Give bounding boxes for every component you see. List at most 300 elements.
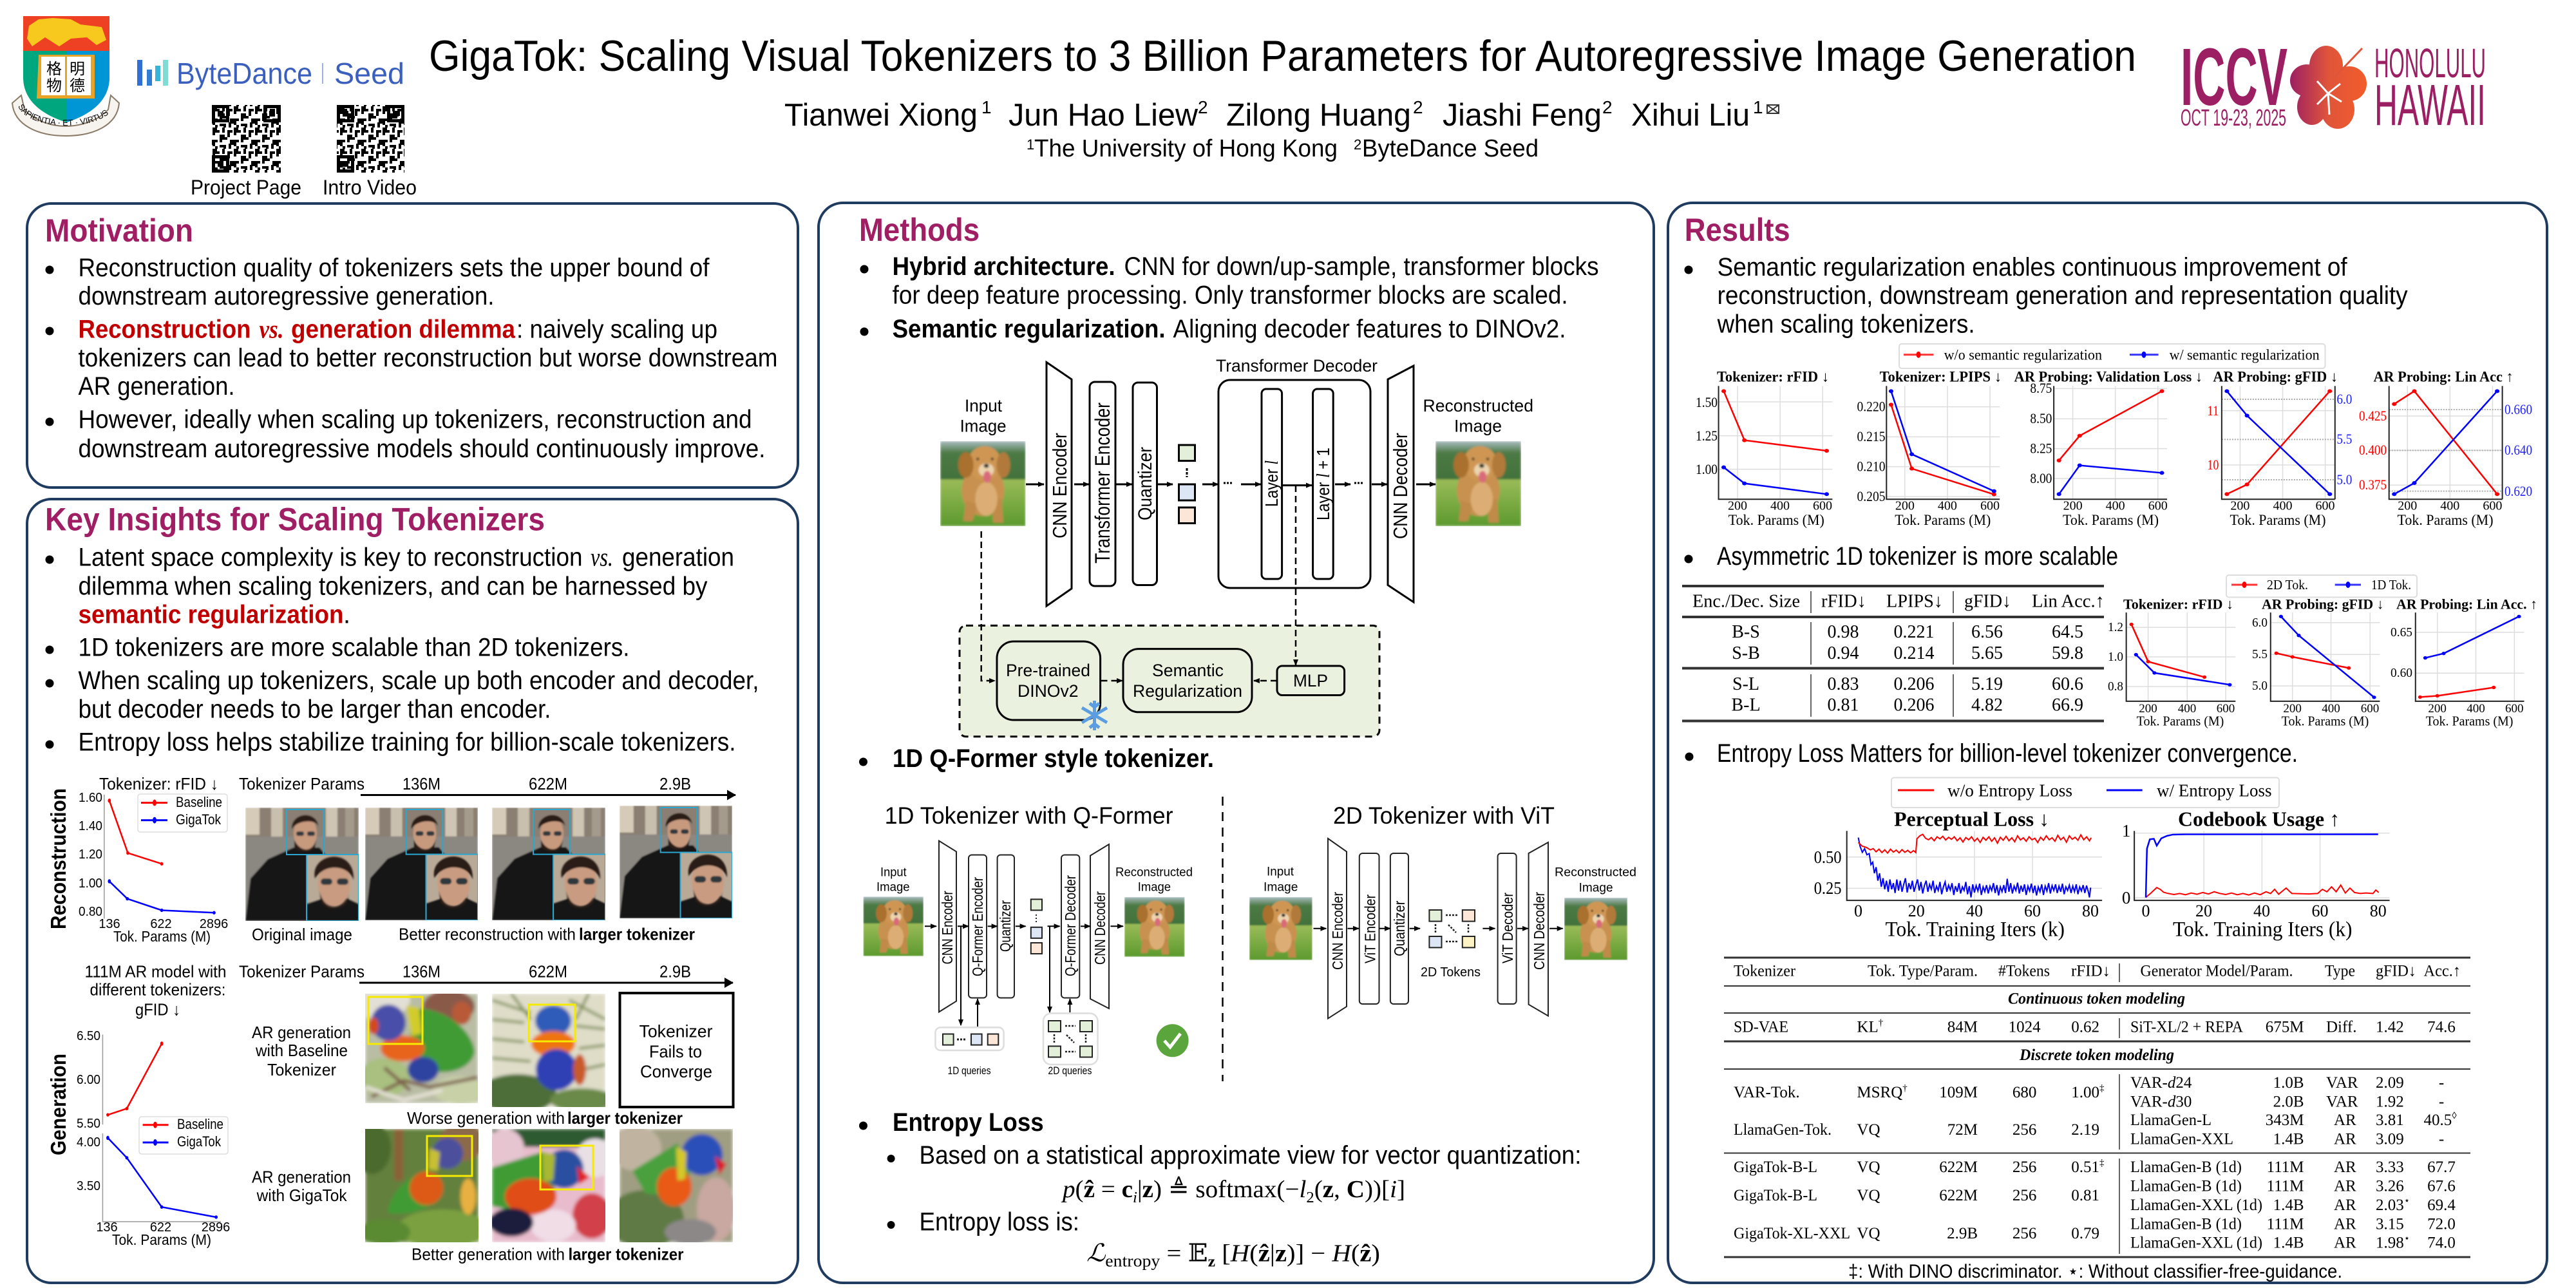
- bullet: dilemma: tokenizers can lead to better reconstruction but worse downstream: [79, 344, 778, 372]
- caption: worse generation: [407, 1108, 683, 1128]
- diagram: 2D tokenizer with ViT: ViT Encoder: [1361, 895, 1378, 963]
- bullet: dilemma: AR generation.: [79, 372, 234, 401]
- chart: tokenizer rFID: 1.60: [79, 791, 102, 805]
- reconstruction comparison header: Tokenizer Params: [239, 774, 365, 793]
- chart: tokenizer rFID: 136: [99, 917, 120, 931]
- pre-trained DINOv2: [997, 641, 1101, 720]
- authors: Zilong Huang: [1226, 98, 1411, 133]
- table: encoder decoder sizes: S-L: [1732, 674, 1759, 694]
- heading: key insights: Key Insights for Scaling Tokenizers: [45, 501, 545, 537]
- rows: VAR and LlamaGen tokenizers: VAR: [2326, 1074, 2358, 1092]
- table header: #Tokens: [1998, 963, 2050, 980]
- chart: generation gFID: 111M AR model with: [85, 962, 227, 981]
- table header: Acc.↑: [2424, 963, 2461, 980]
- chart: validation loss: Tok. Params (M): [2063, 512, 2159, 528]
- chart: generation gFID: 4.00: [77, 1135, 100, 1150]
- table: encoder decoder sizes: B-L: [1731, 695, 1761, 715]
- reconstruction comparison header: 2.9B: [659, 774, 691, 793]
- chart: 2D vs 1D linear accuracy: 0.60: [2391, 666, 2412, 680]
- bullet: ideally: downstream autoregressive models should continuously improve.: [79, 435, 765, 463]
- label: project page: Project Page: [191, 176, 301, 199]
- table: tokenizer comparison: [1724, 958, 2470, 1257]
- reconstruction image: 136M: [365, 808, 478, 920]
- chart: tokenizer rFID: Tok. Params (M): [1728, 512, 1824, 528]
- table: encoder decoder sizes: 0.206: [1893, 695, 1935, 715]
- bullet: upper bound: downstream autoregressive generation.: [79, 282, 495, 310]
- rows: GigaTok tokenizers: ⋆: [2404, 1234, 2410, 1244]
- chart: perceptual loss: 0.50: [1814, 848, 1842, 867]
- rows: GigaTok tokenizers: LlamaGen-XXL (1d): [2130, 1234, 2262, 1252]
- legend: 2D vs 1D tokenizer: [2226, 575, 2417, 597]
- chart: tokenizer LPIPS: 0.210: [1857, 459, 1886, 475]
- chart: generation gFID: 3.50: [77, 1179, 100, 1193]
- chart: validation loss: 8.00: [2030, 470, 2052, 486]
- chart: codebook usage: [2122, 808, 2390, 942]
- bullet: entropy loss: Entropy Loss: [893, 1108, 1044, 1137]
- bullet: ideally: However, ideally when scaling up tokenizers, reconstruction and: [79, 406, 752, 434]
- chart: 2D vs 1D gFID: 5.0: [2252, 679, 2268, 693]
- authors: 1: [981, 97, 992, 117]
- chart: validation loss: 600: [2148, 499, 2168, 513]
- chart: tokenizer LPIPS: Tok. Params (M): [1895, 512, 1991, 528]
- icon: HKU crest: [12, 16, 120, 137]
- chart: codebook usage: 60: [2312, 902, 2329, 920]
- chart: perceptual loss: 80: [2082, 902, 2099, 920]
- table: encoder decoder sizes: 64.5: [2052, 622, 2083, 642]
- chart: tokenizer rFID: 2896: [200, 917, 228, 931]
- chart: 2D vs 1D rFID: 200: [2139, 702, 2157, 715]
- chart: probing linear accuracy: Tok. Params (M): [2397, 512, 2494, 528]
- panel: methods: [819, 203, 1654, 1283]
- caption: better reconstruction: larger tokenizer: [579, 925, 695, 944]
- legend: GigaTok: [176, 811, 222, 828]
- semantic regularization box: Semantic: [1152, 661, 1224, 680]
- formula: entropy loss: entropy: [1105, 1252, 1160, 1271]
- bullet: 1D Q-Former: 1D Q-Former style tokenizer.: [893, 744, 1214, 773]
- chart: tokenizer LPIPS: 0.220: [1857, 399, 1886, 415]
- formula: quantization probability: i: [1133, 1189, 1137, 1206]
- chart: perceptual loss: 0: [1854, 902, 1862, 920]
- rows: VAR and LlamaGen tokenizers: 1.00: [2071, 1084, 2099, 1101]
- label: AR generation with baseline: with Baseline: [255, 1041, 348, 1060]
- icon: HKU crest: 明: [70, 61, 85, 78]
- chart: probing gFID: 5.5: [2336, 431, 2352, 447]
- chart: tokenizer LPIPS: Tokenizer: LPIPS ↓: [1880, 369, 2002, 385]
- table: encoder decoder sizes: S-B: [1732, 643, 1760, 663]
- CNN encoder: CNN Encoder: [1048, 433, 1071, 538]
- heading: methods: Methods: [859, 212, 980, 248]
- legend: semantic regularization: [1899, 344, 2325, 368]
- chart: probing linear accuracy: 200: [2398, 499, 2417, 513]
- chart: tokenizer rFID: 400: [1770, 499, 1790, 513]
- legend: [138, 794, 227, 832]
- rows: VAR and LlamaGen tokenizers: -: [2439, 1131, 2444, 1148]
- bullet: hybrid architecture: Hybrid architecture.: [893, 252, 1115, 281]
- table: encoder decoder sizes: 60.6: [2052, 674, 2083, 694]
- bullet: semantic regularization: Semantic regularization.: [893, 315, 1166, 343]
- chart: 2D vs 1D linear accuracy: Tok. Params (M): [2426, 713, 2513, 728]
- chart: generation gFID: 2896: [202, 1220, 230, 1235]
- rows: GigaTok tokenizers: 111M: [2267, 1216, 2304, 1233]
- bullet: asymmetric 1D tokenizer: Asymmetric 1D tokenizer is more scalable: [1717, 542, 2118, 571]
- icon: ICCV Honolulu logo: OCT 19-23, 2025: [2181, 104, 2286, 131]
- chart: tokenizer rFID: 600: [1813, 499, 1832, 513]
- table: encoder decoder sizes: 5.19: [1971, 674, 2003, 694]
- authors: Jiashi Feng: [1443, 98, 1602, 133]
- caption: better generation: [412, 1244, 684, 1264]
- legend: entropy loss: [1891, 778, 2279, 808]
- 1D queries: 1D queries: [948, 1065, 990, 1077]
- icon: snowflake: [1082, 701, 1107, 730]
- semantic regularization region: [960, 625, 1379, 737]
- icon: HKU crest: 物: [46, 77, 62, 95]
- rows: VAR and LlamaGen tokenizers: AR: [2334, 1112, 2356, 1129]
- row: SD-VAE: Diff.: [2326, 1019, 2356, 1036]
- MLP box: MLP: [1293, 671, 1328, 690]
- chart: tokenizer rFID: 1.50: [1696, 394, 1718, 410]
- chart: probing gFID: 400: [2273, 499, 2293, 513]
- rows: GigaTok tokenizers: GigaTok-B-L: [1734, 1159, 1817, 1176]
- chart: probing linear accuracy: 0.425: [2359, 408, 2387, 424]
- formula: entropy loss: = 𝔼: [1160, 1240, 1208, 1267]
- diagram: semantic regularization architecture: [940, 356, 1533, 737]
- diagram: 2D tokenizer with ViT: CNN Decoder: [1531, 892, 1548, 970]
- chart: 2D vs 1D gFID: [2252, 596, 2384, 728]
- label: AR generation with baseline: [252, 1023, 351, 1079]
- label: AR generation with baseline: AR generation: [252, 1023, 351, 1042]
- chart: tokenizer LPIPS: 0.215: [1857, 428, 1886, 444]
- table: encoder decoder sizes: Enc./Dec. Size: [1692, 591, 1800, 612]
- bullet: hybrid architecture: [860, 252, 1598, 310]
- flow arrows: [1026, 483, 1435, 486]
- rows: GigaTok tokenizers: 2.03: [2376, 1197, 2404, 1214]
- chart: probing gFID: 200: [2230, 499, 2249, 513]
- input image block: Input: [965, 396, 1002, 415]
- icon: green check: [1157, 1024, 1189, 1057]
- chart: validation loss: [2014, 369, 2202, 528]
- input image block: [940, 396, 1025, 526]
- bullet: dilemma: generation dilemma: [291, 316, 516, 344]
- rows: GigaTok tokenizers: ‡: [2099, 1158, 2105, 1168]
- rows: VAR and LlamaGen tokenizers: LlamaGen-Tok.: [1734, 1121, 1832, 1139]
- chart: 2D vs 1D rFID: 0.8: [2108, 679, 2123, 694]
- chart: generation gFID: 136: [96, 1220, 118, 1235]
- chart: 2D vs 1D linear accuracy: 0.65: [2391, 625, 2412, 639]
- reconstruction image: 622M: [492, 808, 605, 920]
- authors: Jun Hao Liew: [1009, 98, 1198, 133]
- bullet: entropy loss matters: Entropy Loss Matters for billion-level tokenizer convergence.: [1717, 739, 2298, 768]
- parrot image: baseline 622M: [479, 994, 614, 1113]
- table: encoder decoder sizes: 0.214: [1893, 643, 1935, 663]
- icon: ICCV Honolulu logo: ICCV: [2181, 32, 2287, 122]
- rows: VAR and LlamaGen tokenizers: AR: [2334, 1131, 2356, 1148]
- CNN encoder: [1046, 362, 1072, 606]
- 2D queries: [1043, 1014, 1097, 1077]
- formula: quantization probability: z) ≜ softmax(−l: [1142, 1176, 1306, 1203]
- table: encoder decoder sizes: 0.98: [1828, 622, 1859, 642]
- bullet: entropy loss: Based on a statistical approximate view for vector quantization:: [920, 1141, 1582, 1170]
- table: encoder decoder sizes: 0.83: [1828, 674, 1859, 694]
- rows: GigaTok tokenizers: 0.79: [2071, 1225, 2099, 1242]
- diagram: 1D tokenizer with Q-Former: CNN Decoder: [1092, 891, 1108, 965]
- chart: perceptual loss: Perceptual Loss ↓: [1894, 808, 2049, 831]
- rows: GigaTok tokenizers: 256: [2012, 1187, 2036, 1204]
- authors: 2: [1198, 97, 1208, 117]
- rows: GigaTok tokenizers: AR: [2334, 1234, 2356, 1252]
- pre-trained DINOv2: Pre-trained: [1006, 661, 1090, 680]
- bullet: encoder and decoder: When scaling up tokenizers, scale up both encoder and decoder,: [79, 667, 759, 695]
- callout: tokenizer fails to converge: Converge: [640, 1062, 712, 1081]
- chart: 2D vs 1D gFID: 5.5: [2252, 647, 2268, 661]
- bullet: semantic regularization: [860, 315, 1566, 343]
- label: AR generation with baseline: Tokenizer: [267, 1060, 336, 1079]
- heading: results: Results: [1685, 212, 1790, 248]
- chart: 2D vs 1D gFID: 6.0: [2252, 616, 2268, 630]
- header: logos and title: [12, 16, 2486, 199]
- chart: 2D vs 1D rFID: 1.2: [2108, 620, 2123, 634]
- diagram: 2D tokenizer with ViT: ViT Decoder: [1499, 893, 1516, 963]
- chart: probing linear accuracy: 0.400: [2359, 442, 2387, 458]
- bullet: latent space: dilemma when scaling tokenizers, and can be harnessed by: [79, 572, 707, 600]
- chart: codebook usage: 20: [2195, 902, 2212, 920]
- rows: VAR and LlamaGen tokenizers: 2.19: [2071, 1121, 2099, 1139]
- rows: GigaTok tokenizers: 0.81: [2071, 1187, 2099, 1204]
- rows: VAR and LlamaGen tokenizers: 256: [2012, 1121, 2036, 1139]
- formula: entropy loss: [: [1215, 1240, 1231, 1267]
- chart: probing linear accuracy: [2359, 369, 2532, 528]
- icon: HKU crest: 德: [70, 77, 85, 95]
- bullet: latent space: semantic regularization: [79, 601, 344, 629]
- chart: validation loss: 200: [2063, 499, 2083, 513]
- rows: VAR and LlamaGen tokenizers: 680: [2012, 1084, 2036, 1101]
- reconstruction comparison header: [239, 774, 735, 795]
- chart: tokenizer rFID: 1.20: [79, 848, 102, 862]
- caption: original image: Original image: [252, 925, 352, 944]
- rows: GigaTok tokenizers: AR: [2334, 1216, 2356, 1233]
- generation comparison header: Tokenizer Params: [239, 962, 365, 981]
- rows: GigaTok tokenizers: 72.0: [2427, 1216, 2456, 1233]
- rows: GigaTok tokenizers: 256: [2012, 1159, 2036, 1176]
- chart: probing linear accuracy: 400: [2440, 499, 2459, 513]
- row: SD-VAE: 675M: [2266, 1019, 2304, 1036]
- rows: VAR and LlamaGen tokenizers: -: [2439, 1094, 2444, 1110]
- chart: tokenizer rFID: Tok. Params (M): [113, 928, 211, 945]
- rows: GigaTok tokenizers: GigaTok-B-L: [1734, 1187, 1817, 1204]
- formula: entropy loss: z: [1208, 1254, 1215, 1271]
- reconstruction image: 2.9B: [620, 806, 732, 918]
- chart: tokenizer LPIPS: 0.205: [1857, 488, 1886, 504]
- bullet: latent space: .: [343, 601, 350, 629]
- row: SD-VAE: [1734, 1018, 2456, 1036]
- diagram: 2D tokenizer with ViT: Input: [1267, 866, 1294, 879]
- table: encoder decoder sizes: 0.94: [1828, 643, 1859, 663]
- chart: generation gFID: 6.50: [77, 1029, 100, 1043]
- chart: 2D vs 1D rFID: 400: [2178, 702, 2196, 715]
- authors: 1: [1753, 97, 1763, 117]
- quantizer: Quantizer: [1135, 447, 1156, 520]
- chart: probing linear accuracy: 0.375: [2359, 477, 2387, 493]
- caption: better reconstruction: Better reconstruction with: [399, 925, 576, 944]
- chart: tokenizer rFID: 200: [1728, 499, 1747, 513]
- chart: tokenizer LPIPS: 600: [1980, 499, 2000, 513]
- parrot image: gigatok 622M: [486, 1129, 614, 1242]
- chart: validation loss: 400: [2106, 499, 2125, 513]
- rows: VAR and LlamaGen tokenizers: †: [1902, 1083, 1908, 1094]
- chart: 2D vs 1D rFID: [2108, 596, 2235, 728]
- bullet: dilemma: vs.: [259, 314, 283, 344]
- chart: generation gFID: 6.00: [77, 1073, 100, 1087]
- authors: [784, 97, 1779, 133]
- bullet: semantic regularization: Semantic regularization enables continuous improvement of: [1718, 253, 2347, 281]
- legend: GigaTok: [177, 1133, 222, 1150]
- formula: quantization probability: |: [1137, 1176, 1142, 1203]
- rows: GigaTok tokenizers: 3.15: [2376, 1216, 2404, 1233]
- icon: HKU crest: SAPIENTIA · ET · VIRTUS: [19, 104, 108, 126]
- chart: 2D vs 1D rFID: 1.0: [2108, 650, 2123, 664]
- rows: GigaTok tokenizers: 67.7: [2427, 1159, 2456, 1176]
- legend: semantic regularization: w/o semantic regularization: [1944, 346, 2102, 363]
- rows: VAR and LlamaGen tokenizers: VAR-d24: [2130, 1074, 2192, 1092]
- rows: VAR and LlamaGen tokenizers: ‡: [2099, 1083, 2105, 1094]
- icon: QR code intro video: [337, 105, 404, 173]
- rows: VAR and LlamaGen tokenizers: MSRQ: [1857, 1084, 1902, 1101]
- chart: tokenizer rFID: 1.40: [79, 819, 102, 833]
- chart: perceptual loss: [1814, 808, 2102, 942]
- row: SD-VAE: 0.62: [2071, 1019, 2099, 1036]
- caption: worse generation: Worse generation with: [407, 1108, 565, 1128]
- callout: tokenizer fails to converge: [620, 993, 733, 1107]
- rows: GigaTok tokenizers: ⋆: [2404, 1196, 2410, 1206]
- rows: GigaTok tokenizers: VQ: [1857, 1187, 1880, 1204]
- rows: VAR and LlamaGen tokenizers: 2.09: [2376, 1074, 2404, 1092]
- diagram: 1D tokenizer with Q-Former: Quantizer: [997, 900, 1014, 952]
- chart: 2D vs 1D linear accuracy: [2391, 596, 2537, 728]
- icon: ICCV Honolulu logo: [2181, 32, 2486, 138]
- rows: GigaTok tokenizers: 111M: [2267, 1177, 2304, 1195]
- 1D queries: [935, 1027, 1004, 1077]
- bullet: encoder and decoder: [45, 667, 759, 724]
- bullet: semantic regularization: when scaling tokenizers.: [1717, 310, 1975, 339]
- chart: generation gFID: Tok. Params (M): [112, 1231, 211, 1248]
- input image block: Image: [960, 416, 1007, 435]
- legend: entropy loss: w/ Entropy Loss: [2157, 781, 2272, 800]
- table header: rFID↓: [2071, 963, 2110, 980]
- table: encoder decoder sizes: LPIPS↓: [1886, 591, 1943, 612]
- label: reconstruction side: Reconstruction: [46, 788, 70, 929]
- chart: probing gFID: Tok. Params (M): [2230, 512, 2326, 528]
- generation comparison header: [239, 962, 733, 983]
- chart: validation loss: 8.75: [2030, 380, 2052, 396]
- authors: Tianwei Xiong: [784, 98, 978, 133]
- CNN decoder: CNN Decoder: [1389, 433, 1412, 539]
- rows: GigaTok tokenizers: 622M: [1939, 1159, 1978, 1176]
- title: GigaTok: Scaling Visual Tokenizers to 3 Billion Parameters for Autoregressive Image Generation: [429, 32, 2136, 80]
- chart: 2D vs 1D gFID: 400: [2322, 702, 2340, 715]
- parrot image: baseline 136M: [346, 982, 491, 1104]
- bullet: latent space: Latent space complexity is key to reconstruction: [79, 544, 582, 572]
- legend: Baseline: [177, 1116, 223, 1132]
- parrot image: gigatok 136M: [352, 1122, 488, 1248]
- callout: tokenizer fails to converge: Tokenizer: [639, 1022, 713, 1041]
- pre-trained DINOv2: DINOv2: [1018, 681, 1079, 701]
- chart: probing gFID: 6.0: [2336, 391, 2352, 407]
- caption: better generation: Better generation with: [412, 1244, 565, 1264]
- diagram: 2D tokenizer with ViT: Reconstructed: [1555, 866, 1636, 880]
- chart: 2D vs 1D linear accuracy: 200: [2428, 702, 2447, 715]
- rows: VAR and LlamaGen tokenizers: 1.0B: [2273, 1074, 2304, 1092]
- rows: GigaTok tokenizers: 111M: [2267, 1159, 2304, 1176]
- label: AR generation with gigatok: with GigaTok: [256, 1186, 348, 1205]
- rows: VAR and LlamaGen tokenizers: ◊: [2452, 1111, 2457, 1121]
- chart: probing gFID: 5.0: [2336, 471, 2352, 488]
- row: SD-VAE: 1.42: [2376, 1019, 2404, 1036]
- bullet: semantic regularization: [1685, 253, 2408, 339]
- chart: generation gFID: different tokenizers:: [90, 980, 225, 999]
- transformer decoder: Layer l + 1: [1313, 448, 1334, 520]
- chart: probing linear accuracy: 0.620: [2505, 483, 2532, 499]
- formula: quantization probability: 2: [1306, 1189, 1314, 1206]
- diagram: 2D tokenizer with ViT: 2D Tokenizer with ViT: [1333, 802, 1555, 829]
- panel: key insights: [27, 499, 798, 1283]
- row: SD-VAE: 1024: [2009, 1019, 2041, 1036]
- table: encoder decoder sizes: 66.9: [2052, 695, 2083, 715]
- rows: GigaTok tokenizers: GigaTok-XL-XXL: [1734, 1225, 1850, 1242]
- rows: GigaTok tokenizers: LlamaGen-B (1d): [2130, 1177, 2242, 1195]
- rows: GigaTok tokenizers: 1.4B: [2273, 1197, 2304, 1214]
- chart: probing linear accuracy: 600: [2483, 499, 2502, 513]
- parrot image: gigatok 2.9B: [620, 1129, 733, 1242]
- bullet: ideally: [45, 406, 765, 463]
- formula: entropy loss: H(ẑ|z)] − H(ẑ): [1231, 1240, 1379, 1267]
- chart: perceptual loss: 20: [1908, 902, 1925, 920]
- bullet: upper bound: [45, 254, 710, 310]
- chart: 2D vs 1D rFID: 600: [2217, 702, 2235, 715]
- label: AR generation with gigatok: AR generation: [252, 1168, 351, 1187]
- section label: continuous token modeling: Continuous token modeling: [2008, 990, 2185, 1008]
- table: encoder decoder sizes: rFID↓: [1821, 591, 1866, 612]
- rows: GigaTok tokenizers: 0.51: [2071, 1159, 2099, 1176]
- legend: entropy loss: w/o Entropy Loss: [1947, 781, 2072, 800]
- chart: tokenizer rFID: [1696, 369, 1832, 528]
- bullet: hybrid architecture: for deep feature processing. Only transformer blocks are scaled.: [893, 281, 1568, 310]
- rows: GigaTok tokenizers: 256: [2012, 1225, 2036, 1242]
- chart: tokenizer LPIPS: 400: [1938, 499, 1957, 513]
- chart: generation gFID: gFID ↓: [135, 999, 180, 1019]
- diagram: 2D tokenizer with ViT: Image: [1579, 882, 1613, 895]
- tokens: [1179, 445, 1195, 523]
- rows: VAR and LlamaGen tokenizers: [1734, 1074, 2457, 1148]
- bullet: entropy loss: Entropy loss helps stabilize training for billion-scale tokenizers.: [79, 728, 735, 757]
- diagram: 2D tokenizer with ViT: CNN Encoder: [1329, 892, 1346, 970]
- reconstruction comparison header: 622M: [529, 774, 567, 793]
- heading: motivation: Motivation: [45, 213, 193, 249]
- table header: Tokenizer: [1734, 963, 1796, 980]
- chart: 2D vs 1D linear accuracy: AR Probing: Lin Acc. ↑: [2396, 596, 2537, 612]
- reconstruction image: original: [245, 808, 359, 921]
- semantic regularization box: Regularization: [1133, 681, 1242, 701]
- diagram: 1D tokenizer with Q-Former: Q-Former Encoder: [969, 877, 986, 976]
- icon: ICCV Honolulu logo: HAWAII: [2374, 73, 2486, 138]
- rows: VAR and LlamaGen tokenizers: 1.92: [2376, 1094, 2404, 1110]
- chart: codebook usage: 0: [2122, 888, 2130, 907]
- rows: VAR and LlamaGen tokenizers: 3.09: [2376, 1131, 2404, 1148]
- diagram: 1D tokenizer with Q-Former: CNN Encoder: [939, 891, 956, 964]
- chart: tokenizer rFID: 0.80: [79, 905, 102, 919]
- rows: VAR and LlamaGen tokenizers: 2.0B: [2273, 1094, 2304, 1110]
- row: SD-VAE: KL: [1857, 1019, 1879, 1036]
- row: SD-VAE: 74.6: [2427, 1019, 2456, 1036]
- table: encoder decoder sizes: gFID↓: [1964, 591, 2011, 612]
